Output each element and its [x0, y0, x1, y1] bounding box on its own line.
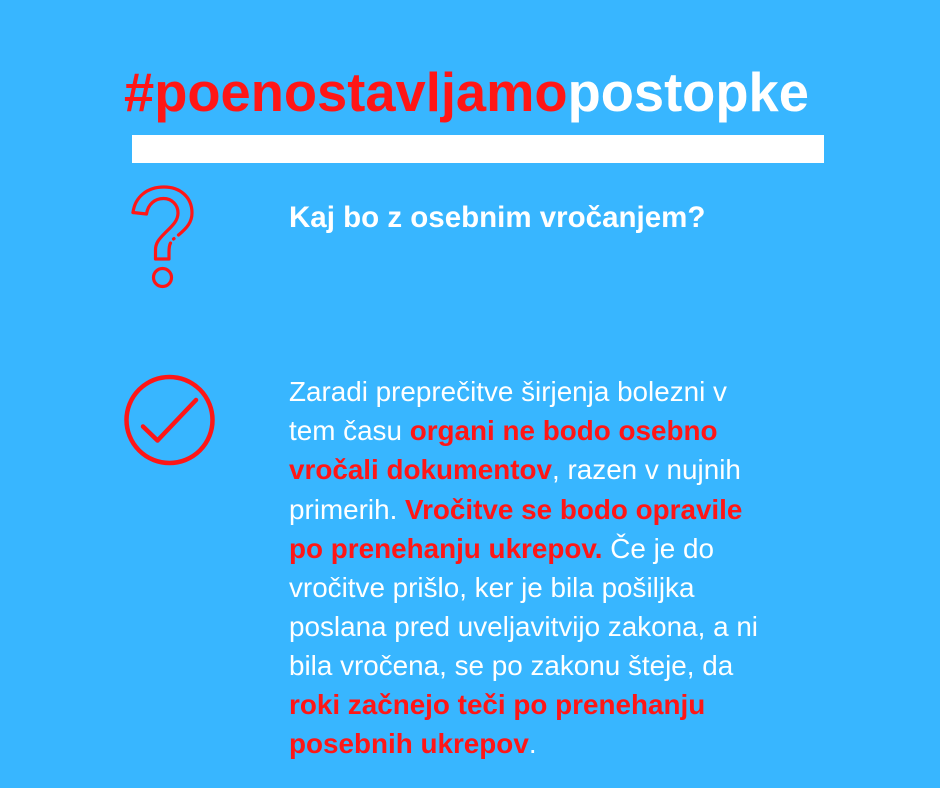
- answer text block: tem času organi ne bodo osebno: [289, 415, 718, 446]
- icon: check mark in circle: [124, 374, 215, 466]
- answer text block: roki začnejo teči po prenehanju: [289, 688, 705, 720]
- answer text block: vročali dokumentov, razen v nujnih: [289, 454, 741, 485]
- answer text block: Zaradi preprečitve širjenja bolezni v: [289, 376, 727, 407]
- answer text block: poslana pred uveljavitvijo zakona, a ni: [289, 610, 758, 642]
- white title bar: [132, 135, 824, 163]
- icon: question mark: [131, 185, 194, 288]
- answer text block: [289, 376, 758, 759]
- title: #poenostavljamopostopke: [124, 62, 809, 123]
- answer text block: vročitve prišlo, ker je bila pošiljka: [289, 572, 694, 602]
- answer text block: bila vročena, se po zakonu šteje, da: [289, 650, 733, 680]
- answer text block: posebnih ukrepov.: [289, 728, 537, 758]
- answer text block: po prenehanju ukrepov. Če je do: [289, 532, 714, 564]
- answer text block: primerih. Vročitve se bodo opravile: [289, 494, 742, 524]
- question heading: Kaj bo z osebnim vročanjem?: [289, 201, 705, 234]
